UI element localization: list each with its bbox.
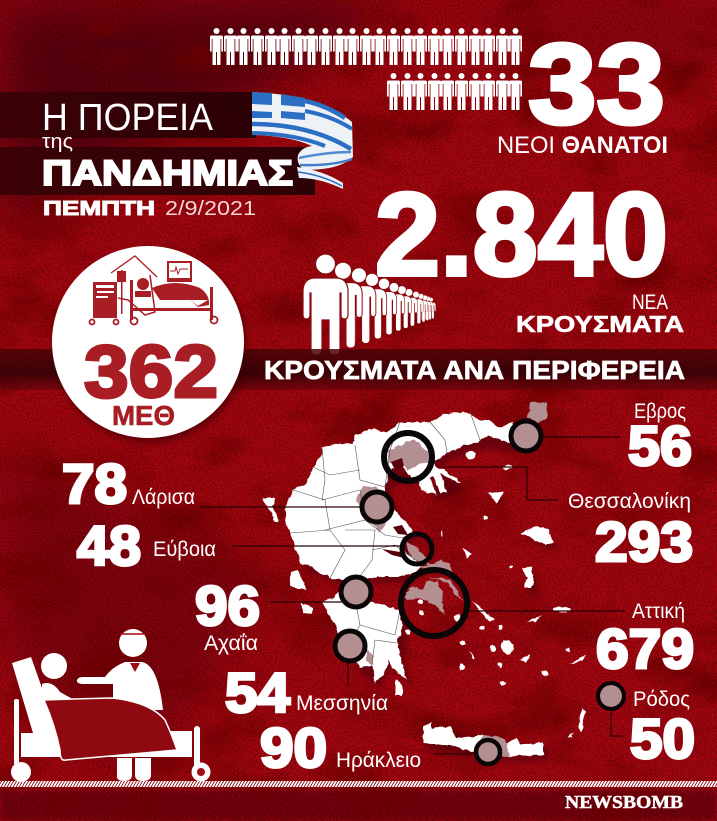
callout: Heraklion: Ηράκλειο — [336, 749, 421, 772]
lower curl — [297, 167, 343, 189]
callout: Evia — [77, 514, 216, 577]
regional borders — [290, 412, 480, 665]
callout: Evia: Εύβοια — [153, 538, 216, 561]
affected regions — [355, 402, 548, 756]
callout: Heraklion: 90 — [260, 716, 327, 779]
Peloponnese — [322, 590, 407, 683]
title: ΠΑΝΔΗΜΙΑΣ — [42, 154, 293, 193]
callout: Achaia: Αχαΐα — [204, 632, 258, 655]
highlight rings — [335, 421, 624, 764]
band heading: ΚΡΟΥΣΜΑΤΑ ΑΝΑ ΠΕΡΙΦΕΡΕΙΑ — [264, 355, 685, 385]
cases label: ΝΕΑ — [632, 291, 668, 314]
dark gulfs — [382, 458, 408, 558]
deaths label: ΝΕΟΙ ΘΑΝΑΤΟΙ — [497, 132, 668, 159]
leader lines — [200, 437, 625, 754]
callout: Larisa: Λάρισα — [132, 486, 195, 509]
islands — [262, 450, 586, 756]
callout: Rhodes: Ρόδος — [633, 688, 690, 711]
panel: ICU circle — [52, 246, 247, 443]
callout: Evros: 56 — [628, 414, 692, 477]
callout: Messinia — [225, 661, 388, 724]
title: Η ΠΟΡΕΙΑ — [42, 97, 214, 139]
callout: Messinia: 54 — [225, 661, 290, 724]
icon: patient and doctor — [11, 629, 210, 782]
title: 2/9/2021 — [165, 198, 256, 220]
callout: Evia: 48 — [77, 514, 141, 577]
cases number: 2.840 — [375, 169, 668, 301]
callout: Larisa: 78 — [62, 452, 127, 515]
callout: Thessaloniki: Θεσσαλονίκη — [568, 490, 691, 513]
title — [42, 97, 293, 220]
map shadow — [290, 419, 559, 762]
land masses — [262, 402, 586, 756]
deaths pictogram second row — [387, 73, 522, 110]
callout: Thessaloniki — [568, 490, 693, 573]
callout: Attica: 679 — [596, 617, 694, 680]
title: ΠΕΜΠΤΗ — [43, 198, 155, 220]
callout: Thessaloniki: 293 — [595, 510, 693, 573]
callout: Evros: Εβρος — [634, 400, 686, 423]
icon: Greek flag ribbon — [252, 92, 353, 189]
logo: Newsbomb: NEWSBOMB — [565, 792, 683, 812]
icon: ICU bed — [90, 256, 218, 324]
cases label — [516, 291, 684, 337]
callout: Rhodes: 50 — [630, 707, 695, 770]
icon: queue of people — [303, 254, 436, 355]
cases label: ΚΡΟΥΣΜΑΤΑ — [516, 311, 684, 337]
callout: Heraklion — [260, 716, 421, 779]
title bands — [0, 92, 315, 195]
filled ring centres — [336, 422, 622, 764]
callout: Larisa — [62, 452, 195, 515]
mainland — [285, 412, 513, 580]
hatched divider — [0, 781, 717, 787]
regional band — [0, 349, 717, 390]
deaths number: 33 — [528, 21, 665, 148]
callout: Attica: Αττική — [632, 600, 685, 623]
callout: Achaia: 96 — [195, 574, 260, 637]
ICU label: ΜΕΘ — [112, 400, 175, 431]
title: της — [42, 131, 73, 153]
ICU number: 362 — [84, 330, 218, 413]
callout: Messinia: Μεσσηνία — [296, 692, 388, 715]
deaths pictogram row — [210, 28, 522, 65]
map of Greece — [200, 402, 625, 764]
main band — [252, 92, 353, 170]
